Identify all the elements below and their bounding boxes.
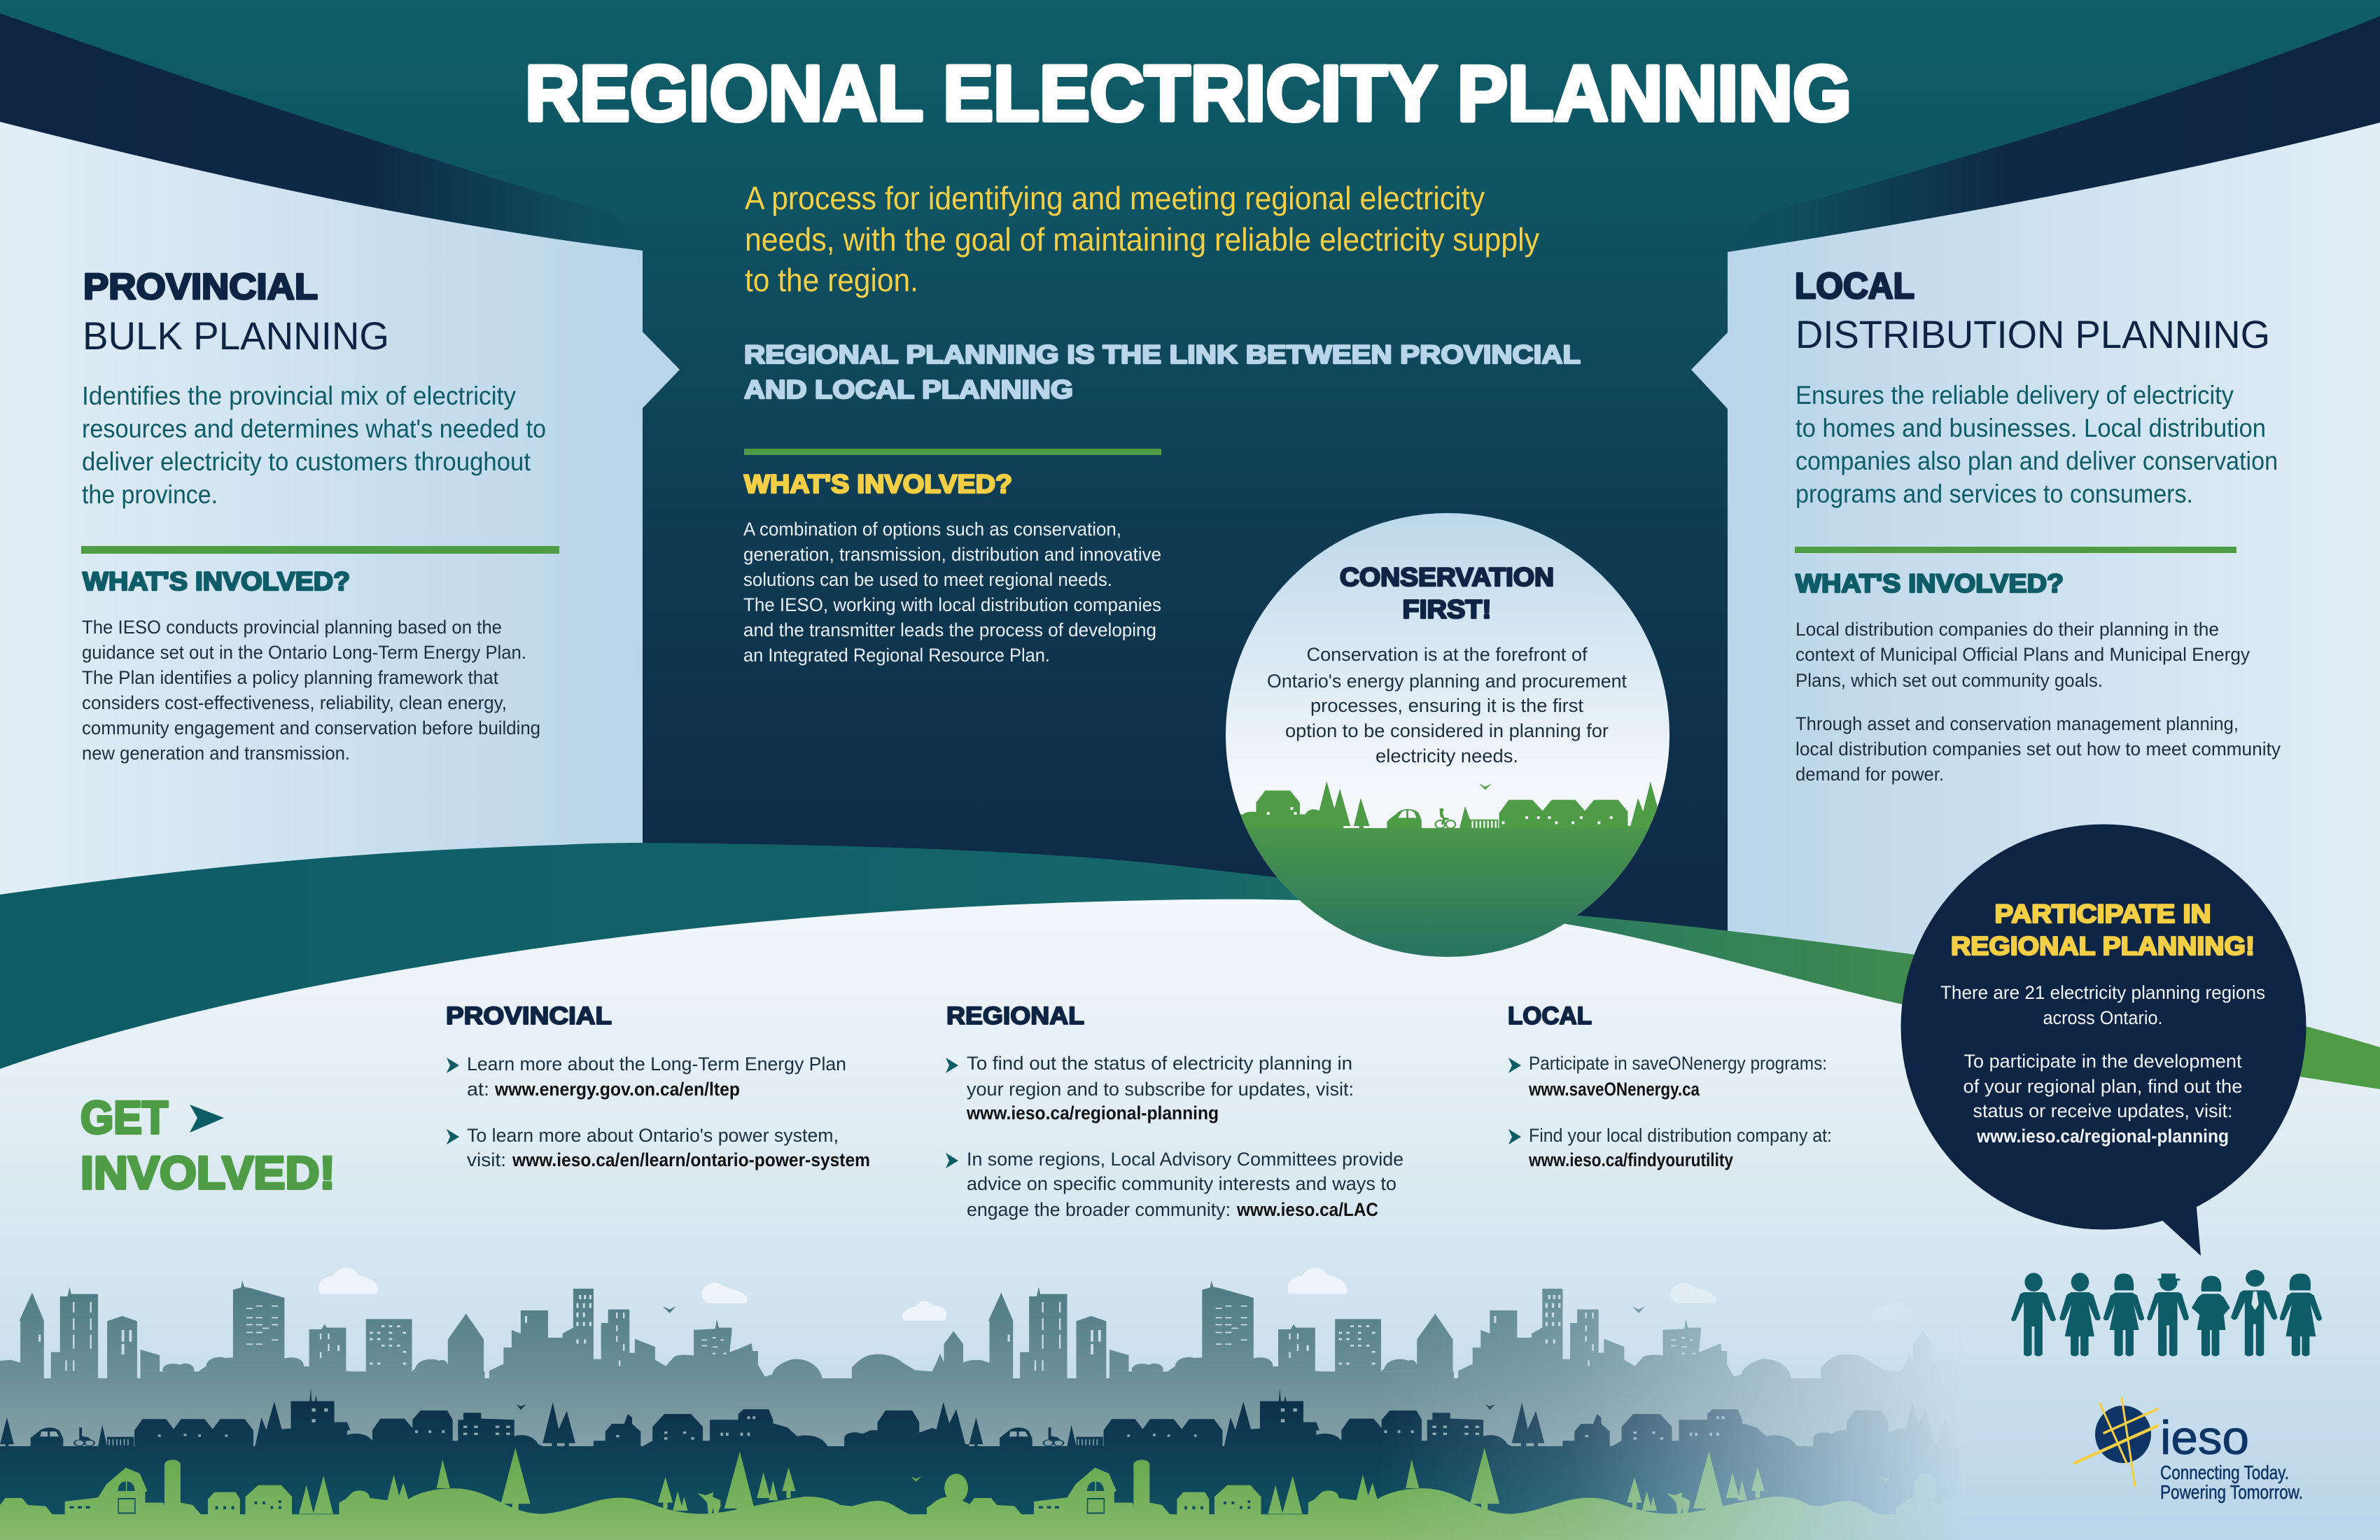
local what's involved text: Local distribution companies do their planning in the <box>1795 619 2219 640</box>
provincial rule <box>81 546 559 554</box>
regional what's involved text: A combination of options such as conservation, <box>743 519 1121 540</box>
circle body text: Ontario's energy planning and procurement <box>1267 671 1627 692</box>
far city windows <box>38 1295 727 1371</box>
column text: www.ieso.ca/regional-planning <box>966 1102 1219 1124</box>
title: REGIONAL ELECTRICITY PLANNING <box>525 50 1851 137</box>
bubble text: of your regional plan, find out the <box>1963 1076 2243 1097</box>
column text: In some regions, Local Advisory Committees provide <box>967 1149 1404 1170</box>
background: teal to navy header and centre <box>0 0 2380 1050</box>
column: provincial links <box>446 1002 870 1170</box>
local what's involved text: demand for power. <box>1795 764 1944 785</box>
lower light background <box>0 899 2380 1540</box>
logo wordmark: ieso <box>2160 1411 2249 1464</box>
logo globe <box>2095 1406 2151 1463</box>
curved band teal to green <box>0 843 2380 1134</box>
column text: www.ieso.ca/LAC <box>1236 1199 1378 1220</box>
local description <box>1795 381 2278 508</box>
icon: car and fence details <box>40 1432 129 1446</box>
circle heading <box>1340 563 1554 624</box>
column text: www.ieso.ca/findyourutility <box>1528 1149 1733 1170</box>
regional what's involved text: solutions can be used to meet regional needs. <box>743 569 1112 590</box>
provincial heading: PROVINCIAL <box>83 267 318 307</box>
circle heading: CONSERVATION <box>1340 563 1554 592</box>
circle body text: electricity needs. <box>1376 746 1518 766</box>
column text: Learn more about the Long-Term Energy Plan <box>467 1054 846 1074</box>
provincial what's involved text: new generation and transmission. <box>82 743 350 764</box>
circle body text: option to be considered in planning for <box>1285 720 1609 741</box>
provincial description: resources and determines what's needed to <box>82 414 546 443</box>
village silhouette <box>0 1388 1018 1518</box>
bubble text <box>1940 982 2265 1147</box>
local what's involved text: Through asset and conservation management planning, <box>1795 713 2239 734</box>
bubble heading: PARTICIPATE IN <box>1995 899 2211 928</box>
column text: advice on specific community interests and ways to <box>967 1173 1396 1194</box>
far bird <box>663 1306 676 1313</box>
logo tagline: Connecting Today. <box>2160 1462 2289 1483</box>
panel: local text <box>1795 266 2281 785</box>
column text: your region and to subscribe for updates, visit: <box>967 1079 1354 1100</box>
clouds <box>318 1268 946 1321</box>
provincial what's involved text <box>82 617 540 764</box>
regional what's involved text: an Integrated Regional Resource Plan. <box>743 645 1050 666</box>
right navy wedge <box>1728 16 2380 252</box>
circle body text: Conservation is at the forefront of <box>1306 644 1588 665</box>
bullets <box>447 1058 459 1144</box>
intro text: needs, with the goal of maintaining reliable electricity supply <box>745 221 1539 258</box>
column text <box>467 1054 870 1170</box>
circle body text <box>1267 644 1627 766</box>
get involved heading: GET <box>80 1091 168 1143</box>
regional what's involved text <box>743 519 1161 666</box>
column text: To learn more about Ontario's power system, <box>467 1125 839 1146</box>
bullets <box>1508 1058 1521 1144</box>
circle heading: FIRST! <box>1403 595 1491 624</box>
regional what's involved text: The IESO, working with local distribution companies <box>743 594 1161 615</box>
intro text: A process for identifying and meeting regional electricity <box>745 180 1485 216</box>
heading: regional planning link: REGIONAL PLANNING IS THE LINK BETWEEN PROVINCIAL <box>744 340 1581 369</box>
heading: regional planning link <box>744 340 1581 404</box>
local what's involved text: local distribution companies set out how to meet community <box>1795 738 2281 760</box>
icon: bicycle wheels <box>74 1440 94 1446</box>
provincial description: deliver electricity to customers throughout <box>82 447 531 476</box>
conservation first circle <box>1218 513 1680 968</box>
bubble text: status or receive updates, visit: <box>1973 1100 2233 1121</box>
bubble text: across Ontario. <box>2043 1007 2163 1028</box>
farmland silhouette <box>0 1448 1018 1540</box>
column: regional links <box>946 1002 1404 1220</box>
logo grid lines <box>2075 1398 2157 1486</box>
column text: Find your local distribution company at: <box>1529 1125 1832 1146</box>
participate speech bubble <box>1901 825 2306 1256</box>
village windows <box>158 1408 755 1440</box>
column text: engage the broader community: <box>967 1199 1231 1220</box>
local what's involved text: Plans, which set out community goals. <box>1795 670 2103 691</box>
provincial description <box>82 382 546 509</box>
logo tagline: Powering Tomorrow. <box>2160 1481 2303 1503</box>
circle sky <box>1226 513 1670 957</box>
intro text <box>745 180 1539 298</box>
icon: get involved arrow <box>190 1105 224 1133</box>
distribution planning subheading: DISTRIBUTION PLANNING <box>1795 312 2270 356</box>
circle body text: processes, ensuring it is the first <box>1310 695 1583 716</box>
bulk planning subheading: BULK PLANNING <box>83 314 389 358</box>
column text: at: <box>467 1079 489 1100</box>
column text <box>966 1053 1404 1220</box>
icon: row of people <box>2011 1270 2322 1356</box>
circle village scene <box>1240 781 1658 957</box>
bubble circle <box>1901 825 2306 1229</box>
provincial what's involved text: The Plan identifies a policy planning framework that <box>82 667 498 688</box>
provincial what's involved text: guidance set out in the Ontario Long-Term Energy Plan. <box>82 642 526 663</box>
regional what's involved heading: WHAT'S INVOLVED? <box>744 470 1012 498</box>
column: local links <box>1508 1002 1832 1170</box>
column text: visit: <box>467 1149 506 1170</box>
regional what's involved text: generation, transmission, distribution and innovative <box>743 544 1161 565</box>
column text: www.energy.gov.on.ca/en/ltep <box>494 1079 740 1100</box>
bubble tail <box>2157 1200 2201 1256</box>
ieso logo <box>2075 1398 2303 1503</box>
local description: Ensures the reliable delivery of electricity <box>1795 381 2234 410</box>
column text <box>1528 1053 1832 1170</box>
provincial what's involved text: considers cost-effectiveness, reliability, clean energy, <box>82 692 507 713</box>
column heading: PROVINCIAL <box>446 1002 612 1030</box>
column heading: REGIONAL <box>946 1002 1084 1030</box>
bullets <box>946 1058 958 1168</box>
column text: www.saveONenergy.ca <box>1528 1079 1700 1100</box>
get involved heading <box>80 1091 335 1198</box>
provincial what's involved text: The IESO conducts provincial planning based on the <box>82 617 502 638</box>
bubble heading <box>1951 899 2255 960</box>
panel: provincial background <box>0 122 680 1050</box>
heading: regional planning link: AND LOCAL PLANNING <box>744 375 1073 404</box>
local description: companies also plan and deliver conservation <box>1795 447 2278 475</box>
provincial description: Identifies the provincial mix of electricity <box>82 382 516 410</box>
bubble text: www.ieso.ca/regional-planning <box>1976 1126 2229 1147</box>
skyline illustration <box>0 1268 1939 1540</box>
provincial what's involved heading: WHAT'S INVOLVED? <box>83 567 350 596</box>
far city silhouette <box>0 1280 1018 1448</box>
provincial what's involved text: community engagement and conservation before building <box>82 718 540 738</box>
provincial description: the province. <box>82 480 218 509</box>
panel: provincial text <box>81 267 559 764</box>
bubble heading: REGIONAL PLANNING! <box>1951 932 2255 960</box>
logo tagline <box>2160 1462 2303 1503</box>
column text: To find out the status of electricity planning in <box>967 1053 1352 1074</box>
bubble text: There are 21 electricity planning regions <box>1940 982 2265 1003</box>
column text: Participate in saveONenergy programs: <box>1529 1053 1827 1074</box>
intro text: to the region. <box>745 262 918 298</box>
bubble text: To participate in the development <box>1964 1051 2242 1072</box>
column heading: LOCAL <box>1508 1002 1592 1030</box>
local description: programs and services to consumers. <box>1795 479 2193 508</box>
local rule <box>1795 547 2236 553</box>
get involved heading: INVOLVED! <box>80 1147 335 1198</box>
regional what's involved text: and the transmitter leads the process of developing <box>743 620 1156 640</box>
local heading: LOCAL <box>1795 266 1914 307</box>
panel: local background <box>1691 122 2380 1050</box>
regional rule <box>744 449 1161 455</box>
local what's involved text <box>1795 619 2281 785</box>
local what's involved heading: WHAT'S INVOLVED? <box>1795 569 2064 598</box>
farm details <box>69 1482 281 1514</box>
local what's involved text: context of Municipal Official Plans and Municipal Energy <box>1795 644 2250 665</box>
left navy wedge <box>0 13 643 251</box>
local description: to homes and businesses. Local distribution <box>1795 414 2266 442</box>
column text: www.ieso.ca/en/learn/ontario-power-system <box>512 1149 870 1170</box>
